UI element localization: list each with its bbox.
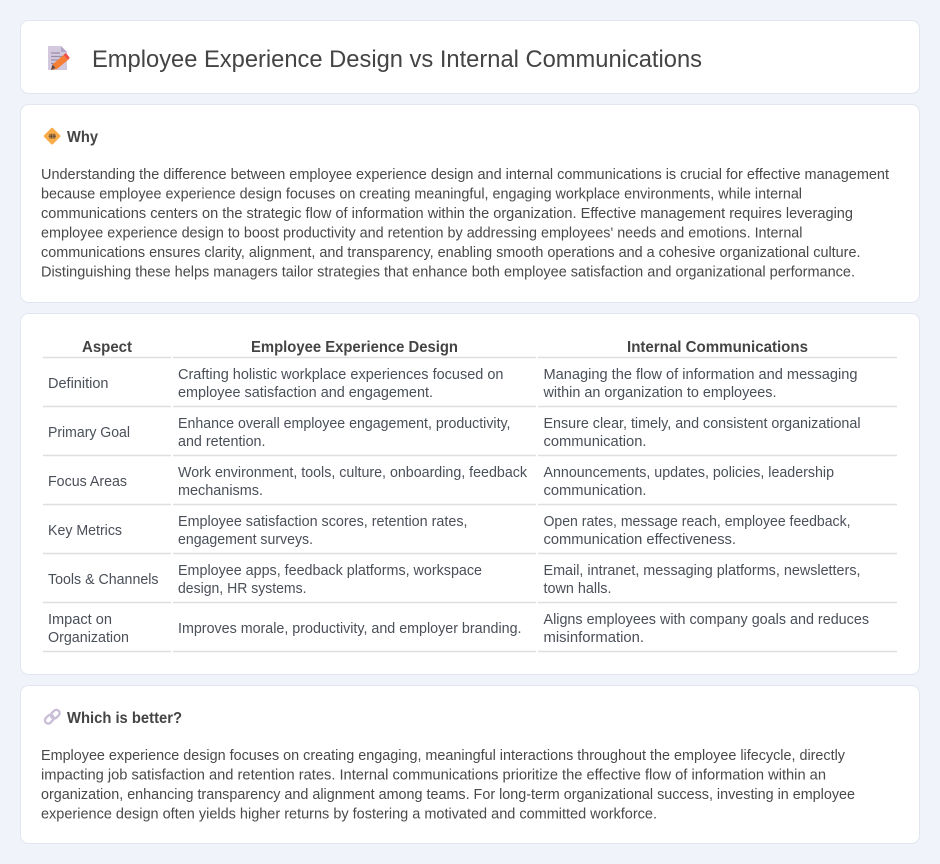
table row: definition	[48, 367, 858, 401]
panel: header	[20, 20, 920, 94]
table row: definition: Definition	[48, 376, 108, 392]
text block: which is better paragraph: organization, enhancing transparency and alignment among teams. For long-term organizational success, investing in employee	[41, 787, 855, 803]
table row: focus areas: communication.	[544, 483, 646, 499]
table row: tools and channels: design, HR systems.	[178, 581, 306, 597]
table row: key metrics: communication effectiveness.	[544, 532, 736, 548]
panel: why	[20, 104, 920, 302]
table row: definition: Crafting holistic workplace experiences focused on	[178, 367, 503, 383]
table row: key metrics: engagement surveys.	[178, 532, 313, 548]
table row: focus areas	[48, 465, 834, 499]
table row: definition: Managing the flow of information and messaging	[544, 367, 858, 383]
title: Employee Experience Design vs Internal Communications	[92, 46, 702, 73]
table row: primary goal: Ensure clear, timely, and consistent organizational	[544, 416, 860, 432]
table row: definition: employee satisfaction and engagement.	[178, 385, 433, 401]
table row: key metrics: Employee satisfaction scores, retention rates,	[178, 514, 468, 530]
table header	[82, 339, 808, 356]
table header: Internal Communications	[627, 339, 808, 356]
table row: tools and channels: Employee apps, feedback platforms, workspace	[178, 563, 482, 579]
table row: impact on organization: Improves morale, productivity, and employer branding.	[178, 621, 522, 637]
table row: key metrics	[48, 514, 850, 548]
table row: primary goal: Primary Goal	[48, 425, 130, 441]
icon: link	[44, 709, 61, 725]
heading: which is better: Which is better?	[67, 710, 182, 727]
text block: why paragraph: communications centers on the strategic flow of information within the organization. Effective management requires leveraging	[41, 206, 853, 222]
table row: impact on organization	[48, 612, 869, 646]
table row: primary goal	[48, 416, 860, 450]
text block: why paragraph: communications ensures clarity, alignment, and transparency, enabling smooth operations and a cohesive organizational culture.	[41, 245, 860, 261]
table row: impact on organization: Impact on	[48, 612, 112, 628]
text block: why paragraph: Distinguishing these helps managers tailor strategies that enhance both employee satisfaction and organizational performance.	[41, 264, 855, 280]
table header: Aspect	[82, 339, 133, 356]
panel: which is better	[20, 686, 920, 844]
table row: tools and channels: Tools & Channels	[48, 572, 158, 588]
panel: comparison table	[20, 314, 920, 674]
table row: key metrics: Key Metrics	[48, 523, 122, 539]
icon: warning diamond	[43, 127, 61, 145]
table row: focus areas: mechanisms.	[178, 483, 263, 499]
table row: impact on organization: Organization	[48, 630, 129, 646]
text block: which is better paragraph: Employee experience design focuses on creating engaging, meaningful interactions throughout the employee lifecycle, directly	[41, 748, 846, 764]
text block: which is better paragraph: impacting job satisfaction and retention rates. Internal communications prioritize the effective flow of information within an	[41, 768, 826, 784]
text block: which is better paragraph: experience design often yields higher returns by fostering a motivated and committed workforce.	[41, 806, 657, 822]
table header: Employee Experience Design	[251, 339, 458, 356]
text block: which is better paragraph	[41, 748, 855, 822]
table row: definition: within an organization to employees.	[542, 385, 776, 401]
table row: impact on organization: Aligns employees with company goals and reduces	[544, 612, 869, 628]
table row: primary goal: Enhance overall employee engagement, productivity,	[178, 416, 510, 432]
table row: primary goal: and retention.	[178, 434, 266, 450]
table row: focus areas: Work environment, tools, culture, onboarding, feedback	[178, 465, 528, 481]
table row: tools and channels: Email, intranet, messaging platforms, newsletters,	[544, 563, 860, 579]
text block: why paragraph: employee experience design to boost productivity and retention by addressing employees' needs and emotions. Internal	[41, 226, 802, 242]
table row: primary goal: communication.	[544, 434, 646, 450]
table row: focus areas: Announcements, updates, policies, leadership	[544, 465, 834, 481]
text block: why paragraph	[41, 167, 889, 280]
table row: impact on organization: misinformation.	[544, 630, 644, 646]
icon: memo with pencil	[48, 46, 70, 70]
table row: tools and channels: town halls.	[544, 581, 612, 597]
text block: why paragraph: Understanding the difference between employee experience design and internal communications is crucial for effective management	[41, 167, 889, 183]
table row: key metrics: Open rates, message reach, employee feedback,	[544, 514, 850, 530]
table row: tools and channels	[48, 563, 860, 597]
table row: focus areas: Focus Areas	[48, 474, 127, 490]
text block: why paragraph: because employee experience design focuses on creating meaningful, engaging workplace environments, while internal	[41, 186, 802, 202]
heading: why: Why	[67, 129, 98, 146]
